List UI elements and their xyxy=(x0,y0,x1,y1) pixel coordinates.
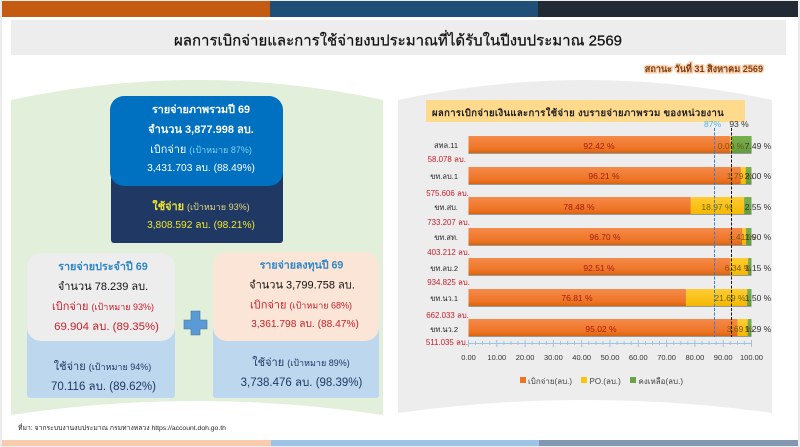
x axis: 90.00 xyxy=(714,353,733,362)
status date: สถานะ วันที่ 31 สิงหาคม 2569 xyxy=(645,62,763,74)
bar: ขท.สบ.: 2.55 % xyxy=(745,202,772,212)
x axis: 80.00 xyxy=(686,353,704,362)
panel: recurring budget: รายจ่ายประจำปี 69 xyxy=(58,260,148,273)
bar: ขท.นว.1 xyxy=(426,289,772,320)
source note: ที่มา: จากระบบงานงบประมาณ กรมทางหลวง https://account.doh.go.th xyxy=(18,423,226,432)
panel: capital budget: 3,738.476 ลบ. (98.39%) xyxy=(241,377,363,389)
bar: ขท.นว.2: 3.69 % xyxy=(727,324,754,334)
bar: สทล.11: 58.078 ลบ. xyxy=(428,155,466,164)
panel: recurring budget xyxy=(27,253,175,398)
bar: ขท.ลบ.1: 1.79 % xyxy=(727,171,754,181)
stacked bar chart xyxy=(426,119,772,362)
bottom colour band xyxy=(2,440,798,446)
panel: budget summary background xyxy=(11,80,383,415)
panel: recurring budget: เบิกจ่าย (เป้าหมาย 93%) xyxy=(52,301,154,313)
panel: capital budget: จำนวน 3,799.758 ลบ. xyxy=(249,280,355,292)
bar: ขท.นว.1: 21.69 % xyxy=(714,293,746,303)
panel: capital budget: ใช้จ่าย (เป้าหมาย 89%) xyxy=(252,356,350,369)
bar: ขท.ลบ.1: 575.606 ลบ. xyxy=(426,189,469,198)
top colour band xyxy=(2,1,798,17)
x axis: 50.00 xyxy=(601,353,619,362)
panel: total budget: เบิกจ่าย (เป้าหมาย 87%) xyxy=(150,144,252,156)
x axis xyxy=(461,340,763,362)
x axis: 100.00 xyxy=(740,353,763,362)
x axis: 30.00 xyxy=(544,353,563,362)
bar: ขท.สบ.: 733.207 ลบ. xyxy=(427,218,470,227)
bar: สทล.11: 0.09 % xyxy=(718,141,745,151)
bar: ขท.ลบ.2: 1.15 % xyxy=(745,263,772,273)
bar: ขท.นว.1: ขท.นว.1 xyxy=(430,294,458,303)
bar: ขท.ลบ.1: ขท.ลบ.1 xyxy=(430,172,458,181)
bar: ขท.สท.: 1.41 % xyxy=(729,232,756,242)
bar: ขท.ลบ.2: 92.51 % xyxy=(583,263,615,273)
bar: ขท.ลบ.2 xyxy=(427,258,772,287)
panel: total budget: 3,431.703 ลบ. (88.49%) xyxy=(147,163,255,174)
bar: ขท.นว.1: 1.50 % xyxy=(745,293,772,303)
bar: ขท.นว.1: 76.81 % xyxy=(561,293,593,303)
bar: สทล.11: 92.42 % xyxy=(583,141,615,151)
x axis: 70.00 xyxy=(657,353,676,362)
target line 93%: 93 % xyxy=(729,119,749,129)
panel: recurring budget: 69.904 ลบ. (89.35%) xyxy=(54,321,159,333)
panel: recurring budget: จำนวน 78.239 ลบ. xyxy=(58,281,148,293)
panel: capital budget xyxy=(213,252,379,398)
chart heading xyxy=(426,100,745,122)
panel: total budget: 3,808.592 ลบ. (98.21%) xyxy=(147,220,255,231)
bar: ขท.สท.: 1.90 % xyxy=(745,232,772,242)
legend: คงเหลือ(ลบ.) xyxy=(638,377,683,386)
bar: ขท.ลบ.2: ขท.ลบ.2 xyxy=(430,264,458,273)
legend: PO.(ลบ.) xyxy=(590,377,621,386)
chart heading: ผลการเบิกจ่ายเงินและการใช้จ่าย งบรายจ่ายภาพรวม ของหน่วยงาน xyxy=(432,107,724,119)
title bar: ผลการเบิกจ่ายและการใช้จ่ายงบประมาณที่ได้รับในปีงบประมาณ 2569 xyxy=(174,30,622,50)
legend: เบิกจ่าย(ลบ.) xyxy=(528,377,572,386)
target line 87%: 87% xyxy=(704,119,721,129)
bar: ขท.นว.2: 511.035 ลบ. xyxy=(426,338,468,347)
legend xyxy=(520,377,683,386)
bar: ขท.สท.: 403.212 ลบ. xyxy=(427,248,470,257)
bar: ขท.สท. xyxy=(427,228,772,257)
panel: recurring budget: 70.116 ลบ. (89.62%) xyxy=(51,381,156,393)
bar: ขท.ลบ.2: 6.34 % xyxy=(725,263,752,273)
bar: ขท.สบ.: 78.48 % xyxy=(563,202,595,212)
x axis: 10.00 xyxy=(487,353,506,362)
bar: สทล.11: สทล.11 xyxy=(434,141,458,150)
panel: capital budget: เบิกจ่าย (เป้าหมาย 68%) xyxy=(250,300,352,312)
x axis: 20.00 xyxy=(516,353,534,362)
bar: ขท.นว.2: 95.02 % xyxy=(585,324,617,334)
icon: plus sign xyxy=(184,311,207,335)
bar: ขท.นว.1: 662.033 ลบ. xyxy=(426,311,469,320)
bar: ขท.นว.2: 1.29 % xyxy=(745,324,772,334)
bar: ขท.ลบ.1: 2.00 % xyxy=(745,171,772,181)
title bar xyxy=(11,20,786,55)
bar: ขท.ลบ.1: 96.21 % xyxy=(588,171,620,181)
bar: สทล.11: 7.49 % xyxy=(745,141,772,151)
bar: ขท.นว.2 xyxy=(426,319,772,347)
bar: ขท.ลบ.2: 934.825 ลบ. xyxy=(427,278,470,287)
bar: ขท.นว.2: ขท.นว.2 xyxy=(430,325,458,334)
x axis: 40.00 xyxy=(572,353,591,362)
panel: capital budget: 3,361.798 ลบ. (88.47%) xyxy=(251,319,359,330)
panel: capital budget: รายจ่ายลงทุนปี 69 xyxy=(260,258,343,272)
x axis: 60.00 xyxy=(629,353,648,362)
bar: ขท.ลบ.1 xyxy=(426,167,772,198)
bar: ขท.สบ.: 18.97 % xyxy=(701,202,733,212)
panel: total budget: ใช้จ่าย (เป้าหมาย 93%) xyxy=(152,199,250,213)
bar: ขท.สบ.: ขท.สบ. xyxy=(434,203,458,212)
panel: chart background xyxy=(398,80,772,413)
panel: total budget: จำนวน 3,877.998 ลบ. xyxy=(148,123,254,136)
bar: ขท.สบ. xyxy=(427,197,772,227)
bar: ขท.สท.: 96.70 % xyxy=(589,232,621,242)
bar: สทล.11 xyxy=(428,136,772,164)
x axis: 0.00 xyxy=(461,353,476,362)
panel: total budget xyxy=(110,96,283,243)
bar: ขท.สท.: ขท.สท. xyxy=(434,233,458,242)
panel: total budget: รายจ่ายภาพรวมปี 69 xyxy=(152,103,250,116)
panel: recurring budget: ใช้จ่าย (เป้าหมาย 94%) xyxy=(54,360,151,373)
